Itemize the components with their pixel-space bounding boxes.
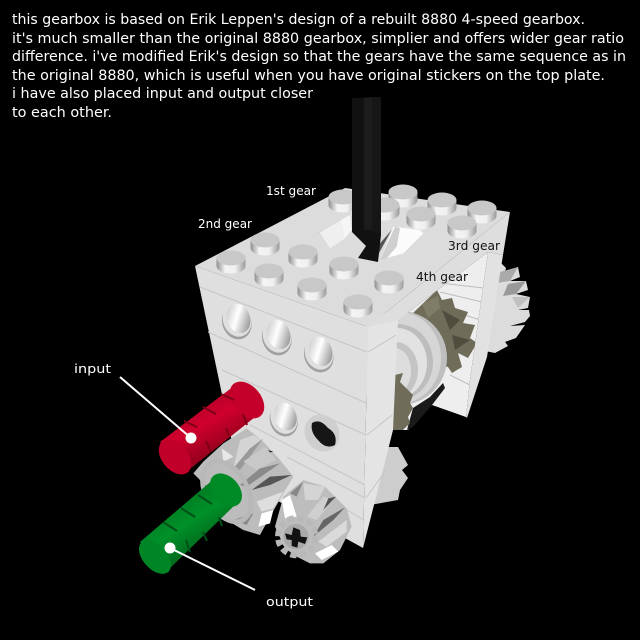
output callout bbox=[164, 542, 313, 609]
intro text block: i have also placed input and output closer bbox=[12, 86, 313, 102]
gearbox housing: front pillar bbox=[363, 320, 398, 548]
rear wall seams bbox=[440, 283, 484, 385]
4th gear (olive) bbox=[413, 290, 477, 373]
black axle strip inside bbox=[407, 383, 445, 430]
3rd gear (white, rear) bbox=[480, 262, 530, 353]
gear stick (black axle) bbox=[352, 97, 381, 262]
gearbox housing: top band on right side bbox=[368, 212, 510, 327]
gear labels: 1st gear bbox=[266, 183, 317, 198]
intro text block bbox=[12, 12, 626, 121]
studs bbox=[216, 184, 496, 318]
input axle (red) bbox=[152, 375, 271, 481]
gear labels bbox=[198, 183, 501, 284]
intro text block: to each other. bbox=[12, 105, 112, 121]
gearbox housing: top plate bbox=[195, 188, 510, 327]
gear labels: 3rd gear bbox=[448, 238, 501, 253]
gear 2 (small bevel gear) bbox=[275, 480, 352, 563]
intro text block: the original 8880, which is useful when you have original stickers on the top plate. bbox=[12, 68, 605, 84]
gearbox housing: rear pillar bbox=[466, 252, 503, 418]
gear labels: 2nd gear bbox=[198, 216, 253, 231]
small gear piece under the pillar bbox=[370, 447, 408, 505]
input callout bbox=[74, 361, 196, 444]
intro text block: it's much smaller than the original 8880 gearbox, simplier and offers wider gear ratio bbox=[12, 31, 624, 47]
input callout: input bbox=[74, 361, 111, 376]
white clutch drum bbox=[353, 311, 447, 405]
lower olive gear bbox=[393, 373, 413, 430]
output axle (green) bbox=[133, 467, 248, 580]
output callout: output bbox=[266, 594, 313, 609]
holes on left face bbox=[217, 299, 346, 458]
intro text block: this gearbox is based on Erik Leppen's design of a rebuilt 8880 4-speed gearbox. bbox=[12, 12, 585, 28]
openings in top plate bbox=[307, 215, 423, 260]
left-face brick seams bbox=[200, 287, 396, 520]
intro text block: difference. i've modified Erik's design so that the gears have the same sequence as in bbox=[12, 49, 626, 65]
gear 1 (large bevel gear) bbox=[192, 428, 293, 535]
gear labels: 4th gear bbox=[416, 269, 469, 284]
gearbox housing: left face bbox=[195, 266, 368, 548]
rear wall inside opening bbox=[393, 252, 488, 430]
